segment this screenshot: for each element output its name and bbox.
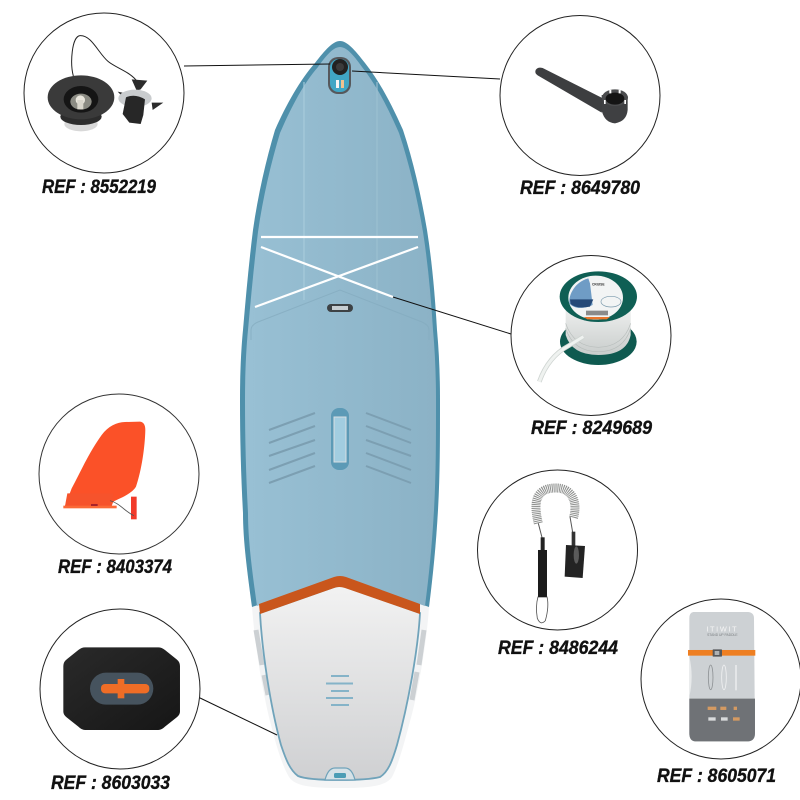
deck stringer lines (304, 82, 377, 300)
circle frame (478, 470, 638, 630)
reference label: REF : 8552219 (42, 177, 156, 198)
circle frame (40, 609, 200, 769)
panel: bungee cord spool (511, 256, 671, 439)
reference label: REF : 8249689 (531, 418, 652, 439)
blue deck rim (240, 41, 440, 607)
paddle board (240, 41, 440, 788)
right vent lines (366, 413, 411, 483)
circle frame (511, 256, 671, 416)
deck surface (245, 47, 436, 606)
icon: valve and cap (48, 36, 163, 131)
icon: carry bag: STAND UP PADDLE (707, 633, 738, 637)
reference label: REF : 8486244 (498, 638, 618, 659)
board outline (240, 41, 440, 788)
icon: cord spool (539, 271, 637, 382)
panel: fin box patch (40, 609, 200, 794)
traction pad fold (251, 290, 429, 340)
icon: black patch with orange slot (63, 647, 180, 730)
icon: coiled leash (536, 488, 585, 623)
grey tail edge patches (256, 630, 424, 700)
fin box (325, 768, 355, 780)
leader lines (184, 64, 511, 735)
panel: valve wrench (500, 16, 660, 199)
reference label: REF : 8403374 (58, 557, 172, 578)
icon: wrench (535, 68, 628, 123)
orange chevron stripe (259, 576, 420, 614)
panel: valve part (24, 13, 184, 198)
reference label: REF : 8649780 (520, 178, 640, 199)
circle frame (641, 599, 800, 759)
panel: fin (39, 394, 199, 578)
panel: carry bag (641, 599, 800, 787)
circle frame (500, 16, 660, 176)
icon: carry bag: ITIWIT (706, 624, 738, 633)
circle frame (24, 13, 184, 173)
bungee cords (255, 237, 418, 307)
left vent lines (269, 413, 315, 483)
reference label: REF : 8603033 (51, 773, 170, 794)
panel: leash (478, 470, 638, 659)
icon: cord spool: CRUISE (592, 282, 605, 286)
reference label: REF : 8605071 (657, 766, 776, 787)
carry handle (331, 408, 349, 470)
icon: carry bag (688, 612, 755, 741)
icon: orange fin (63, 422, 145, 519)
circle frame (39, 394, 199, 554)
inflation valve plate (328, 57, 351, 94)
white tail pad (260, 586, 420, 780)
tail lines (326, 676, 353, 705)
logo pill (327, 304, 353, 312)
